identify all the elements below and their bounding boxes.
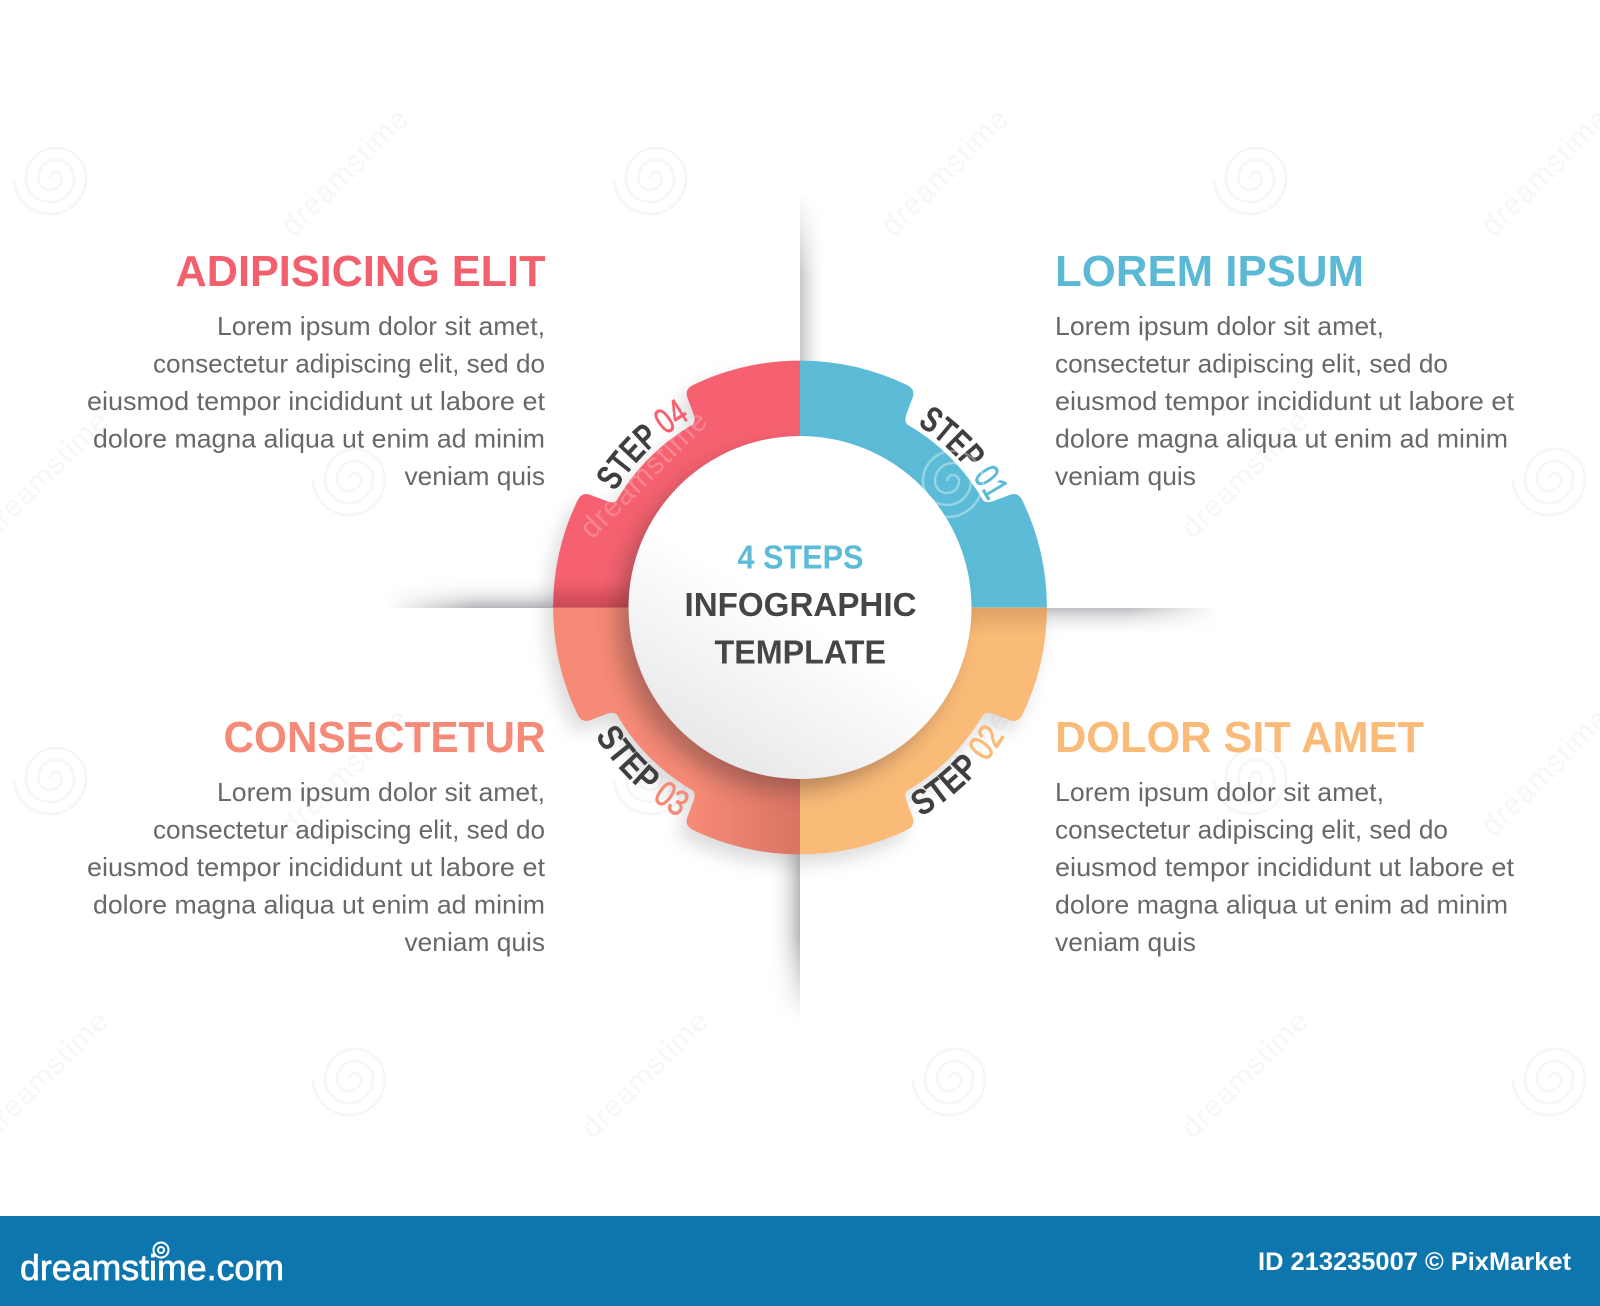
heading: ADIPISICING ELIT xyxy=(176,247,546,296)
fold shadow: right xyxy=(1045,608,1220,638)
fold shadow: left xyxy=(385,577,557,608)
text block: eiusmod tempor incididunt ut labore et xyxy=(87,386,546,416)
center disc xyxy=(628,436,972,779)
fold shadow: top xyxy=(800,195,827,365)
ring watermark: dreamstime xyxy=(574,404,715,545)
step label: step 04: STEP 04 xyxy=(597,399,688,489)
text block: Lorem ipsum dolor sit amet, xyxy=(217,777,545,807)
watermark pattern: dreamstime xyxy=(875,702,1016,843)
text block xyxy=(1055,777,1515,957)
segment: step 04 red xyxy=(553,361,800,608)
fold shadow: bottom xyxy=(768,845,800,1020)
text block: veniam quis xyxy=(1055,927,1196,957)
text block xyxy=(87,777,546,957)
text block: consectetur adipiscing elit, sed do xyxy=(153,814,545,844)
watermark pattern xyxy=(0,102,1600,1145)
text block: eiusmod tempor incididunt ut labore et xyxy=(1055,852,1515,882)
ring drop shadow xyxy=(546,371,1040,864)
watermark pattern: dreamstime xyxy=(275,102,416,243)
text block: dolore magna aliqua ut enim ad minim xyxy=(93,424,545,454)
ring watermark xyxy=(574,404,983,545)
text block: consectetur adipiscing elit, sed do xyxy=(1055,814,1448,844)
center disc shadow xyxy=(618,451,958,791)
watermark pattern: dreamstime xyxy=(1175,1004,1316,1145)
footer logo mark xyxy=(154,1242,168,1258)
watermark pattern: dreamstime xyxy=(275,702,416,843)
heading: CONSECTETUR xyxy=(224,713,546,762)
watermark pattern: dreamstime xyxy=(575,1004,716,1145)
step label: step 03: STEP 03 xyxy=(598,726,689,815)
footer credit: ID 213235007 © PixMarket xyxy=(1258,1248,1572,1276)
watermark pattern: dreamstime xyxy=(1175,404,1316,545)
text block: veniam quis xyxy=(1055,461,1196,491)
segment: step 03 salmon xyxy=(553,608,800,854)
segment: step 02 orange xyxy=(800,608,1047,854)
heading: LOREM IPSUM xyxy=(1055,247,1364,296)
center text: TEMPLATE xyxy=(714,634,886,670)
segment: step 01 blue xyxy=(800,361,1047,608)
text block: dolore magna aliqua ut enim ad minim xyxy=(93,890,545,920)
watermark pattern: dreamstime xyxy=(875,102,1016,243)
segment fold shading xyxy=(550,580,1050,858)
panel: adipisicing elit xyxy=(87,247,546,491)
text block: eiusmod tempor incididunt ut labore et xyxy=(87,852,546,882)
text block: dolore magna aliqua ut enim ad minim xyxy=(1055,890,1508,920)
footer logo: dreamstime.com xyxy=(20,1247,284,1288)
segmented ring xyxy=(553,361,1047,854)
text block xyxy=(1055,311,1515,491)
text block: Lorem ipsum dolor sit amet, xyxy=(1055,311,1384,341)
panel: lorem ipsum xyxy=(1055,247,1515,491)
text block: veniam quis xyxy=(404,461,545,491)
center text: 4 STEPS xyxy=(738,538,864,576)
text block xyxy=(87,311,546,491)
center text xyxy=(684,538,916,670)
text block: Lorem ipsum dolor sit amet, xyxy=(1055,777,1384,807)
text block: veniam quis xyxy=(404,927,545,957)
center text: INFOGRAPHIC xyxy=(684,586,916,623)
footer bar xyxy=(0,1216,1600,1306)
text block: dolore magna aliqua ut enim ad minim xyxy=(1055,424,1508,454)
step label: step 02: STEP 02 xyxy=(912,725,1005,814)
heading: DOLOR SIT AMET xyxy=(1055,713,1424,762)
text block: eiusmod tempor incididunt ut labore et xyxy=(1055,386,1515,416)
step label: step 01: STEP 01 xyxy=(920,407,1008,501)
text block: Lorem ipsum dolor sit amet, xyxy=(217,311,545,341)
text block: consectetur adipiscing elit, sed do xyxy=(153,348,545,378)
panel: dolor sit amet xyxy=(1055,713,1515,957)
text block: consectetur adipiscing elit, sed do xyxy=(1055,348,1448,378)
panel: consectetur xyxy=(87,713,546,957)
